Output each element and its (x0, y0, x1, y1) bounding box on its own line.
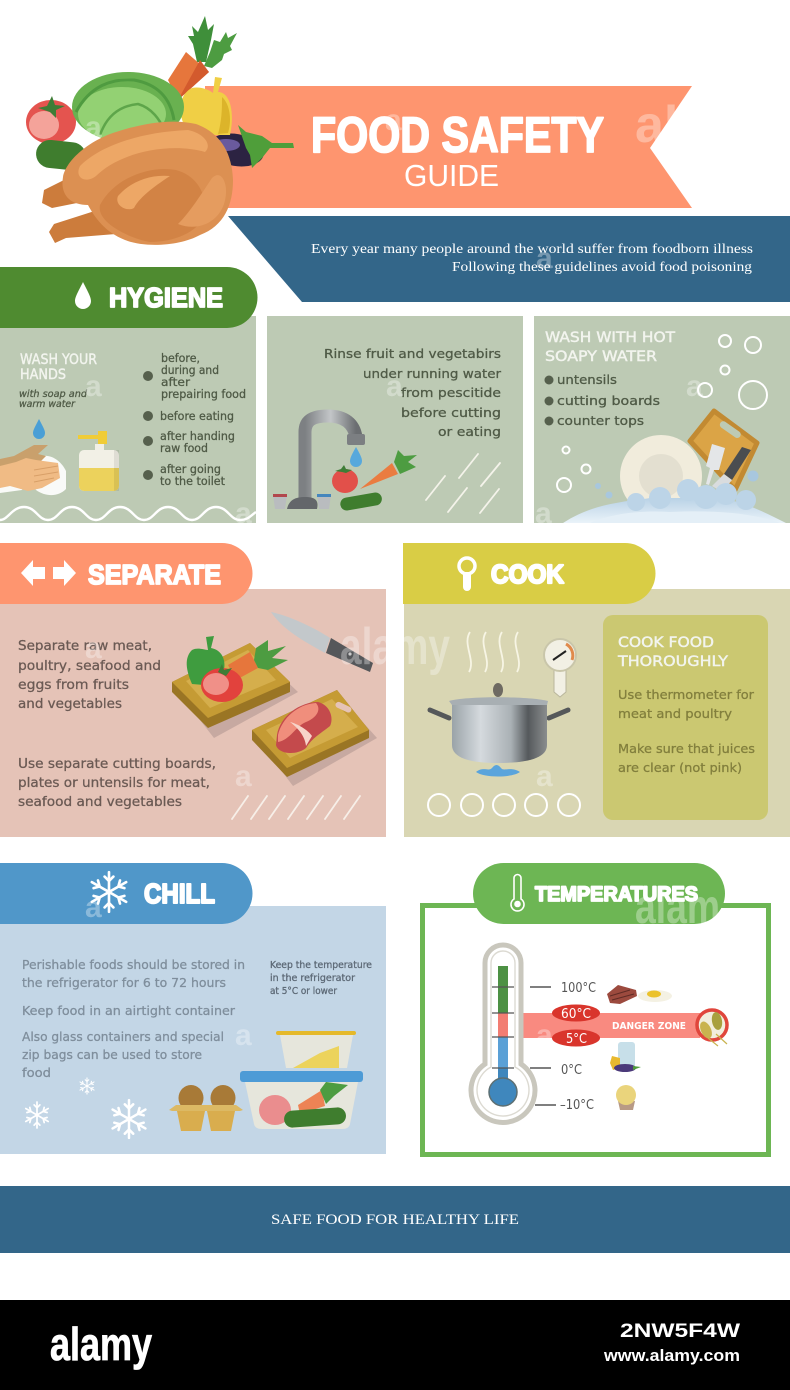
pepper (187, 636, 224, 685)
list: items to wash: cutting boards (557, 393, 660, 408)
icon: muffin (616, 1085, 636, 1110)
text: separate boards (18, 757, 216, 810)
scale labels: 0°C (561, 1062, 582, 1078)
subtitle: GUIDE (404, 158, 499, 193)
icon: vegetable container (240, 1071, 363, 1129)
icon: knife (271, 612, 373, 672)
icon: cheese container (276, 1031, 356, 1068)
intro text: Every year many people around the world suffer from foodborn illness (311, 242, 753, 257)
list: when to wash: prepairing food (161, 387, 246, 401)
text: separate boards: Use separate cutting boards, (18, 757, 216, 772)
heading tab: separate (0, 543, 252, 604)
text: rinse instructions: under running water (363, 366, 502, 381)
card: cook food thoroughly: Make sure that juices (618, 741, 755, 756)
icon: gas flame (476, 765, 520, 776)
icon: cucumber (339, 491, 383, 512)
section: chill (0, 863, 386, 1154)
subheading: with soap and (19, 389, 88, 400)
text: fridge temperature: in the refrigerator (270, 973, 355, 984)
text: storage guidance: the refrigerator for 6 to 72 hours (22, 975, 226, 990)
watermarks: al (635, 96, 678, 154)
card: cook food thoroughly: THOROUGHLY (617, 654, 728, 670)
icon: eggplant (206, 125, 294, 171)
logo text: alamy (50, 1318, 152, 1370)
panel: wash your hands: warm water (19, 399, 76, 410)
text: separate raw foods (18, 639, 161, 712)
section: cook (403, 543, 790, 837)
list: when to wash: before, (161, 351, 200, 365)
text: storage guidance: food (22, 1065, 51, 1080)
panel: separate (0, 589, 386, 837)
watermarks (85, 96, 720, 1052)
text: rinse instructions: from pescitide (401, 385, 501, 400)
list: when to wash: after (161, 375, 190, 389)
text: storage guidance (22, 957, 245, 1080)
watermarks: a (536, 1019, 553, 1052)
icon: faucet (273, 416, 365, 509)
watermarks: a (235, 760, 252, 793)
text: fridge temperature (270, 960, 372, 997)
text: rinse instructions: before cutting (401, 405, 501, 420)
scale ticks (530, 987, 556, 1105)
list: when to wash: to the toilet (160, 474, 225, 488)
label: 60 degrees: 60°C (561, 1007, 591, 1022)
watermarks: a (686, 370, 703, 403)
text: rinse instructions: Rinse fruit and vegetabirs (324, 346, 501, 361)
thermometer column (489, 966, 517, 1106)
icon: meat and egg (607, 985, 672, 1004)
icon: no bacteria (697, 1010, 727, 1046)
text: storage guidance: Keep food in an airtight container (22, 1003, 236, 1018)
decorative bubbles (557, 335, 767, 492)
title: FOOD SAFETY (311, 107, 604, 163)
text: rinse instructions (324, 346, 502, 439)
banner: intro (228, 216, 790, 302)
panel: cook (404, 589, 790, 837)
heading text: TEMPERATURES (535, 883, 698, 906)
heading text: HYGIENE (109, 282, 223, 313)
icon: meat board (252, 690, 377, 786)
heading tab: hygiene (0, 267, 258, 328)
list: when to wash: during and (161, 363, 219, 377)
section: temperatures (422, 863, 768, 1154)
icon: carrot (360, 450, 417, 489)
icon: vegetable board (172, 636, 298, 738)
heading tab: temperatures (473, 863, 725, 924)
heading text: SEPARATE (88, 559, 221, 590)
banner: intro: Following these guidelines avoid food poisoning (452, 260, 752, 275)
watermarks: a (85, 370, 102, 403)
panel: wash with hot soapy water: SOAPY WATER (545, 349, 657, 365)
icon: washing hands (0, 445, 66, 495)
icon: bell pepper (180, 77, 232, 135)
carrot (228, 652, 258, 680)
list: when to wash: before eating (160, 409, 234, 423)
icon: snowflake (92, 872, 126, 912)
icon: dial thermometer (544, 639, 576, 697)
steak (276, 702, 332, 753)
icon: thermometer (511, 874, 524, 911)
icon: cucumber (35, 139, 87, 172)
text: fridge temperature: Keep the temperature (270, 960, 372, 971)
scale labels: –10°C (560, 1097, 594, 1113)
icon: small soap bubbles (595, 470, 758, 498)
icon: cutting board (690, 411, 757, 490)
icon: thermometer key (459, 558, 475, 591)
icon: small snowflakes (26, 1078, 145, 1138)
card: cook food thoroughly (603, 615, 768, 820)
list: when to wash: after going (160, 462, 221, 476)
watermarks: a (235, 497, 252, 530)
text: separate raw foods: Separate raw meat, (18, 639, 152, 654)
decorative steam (467, 632, 519, 672)
heading text: COOK (491, 559, 564, 589)
image id: 2NW5F4W (620, 1321, 740, 1342)
panel: temperature frame (422, 906, 768, 1154)
panel: wash your hands: HANDS (20, 367, 66, 383)
heading: wash your hands: WASH YOUR (20, 352, 97, 368)
card text: Use thermometer for (618, 687, 755, 702)
decorative rain (426, 454, 500, 513)
text: storage guidance: Perishable foods should be stored in (22, 957, 245, 972)
panel: chill (0, 906, 386, 1154)
text: rinse instructions: or eating (438, 424, 501, 439)
watermarks: a (385, 104, 402, 137)
text: separate boards: plates or untensils for meat, (18, 776, 210, 791)
icon: cooking pot (430, 683, 568, 763)
list: when to wash (143, 351, 246, 488)
tomato (201, 668, 243, 702)
icon: egg carton (169, 1085, 243, 1131)
text: storage guidance: Also glass containers and special (22, 1029, 224, 1044)
icon: spatula and knife (706, 444, 751, 492)
section: hygiene (0, 267, 258, 523)
panel: rinse produce (267, 316, 523, 523)
watermarks: a (85, 891, 102, 924)
icon: cabbage (72, 72, 184, 142)
icon: roast chicken (42, 122, 233, 245)
icon: tomato (26, 96, 76, 144)
watermarks: a (85, 632, 102, 665)
card: cook food thoroughly: are clear (not pink) (618, 760, 742, 775)
website: www.alamy.com (603, 1346, 740, 1365)
icon: soap dispenser (78, 431, 119, 491)
watermarks: a (386, 370, 403, 403)
icon: drop (75, 282, 91, 309)
banner: title ribbon (205, 86, 692, 208)
heading text: CHILL (144, 878, 215, 909)
text: separate raw foods: and vegetables (18, 697, 122, 712)
heading tab: cook (403, 543, 655, 604)
watermarks: a (536, 760, 553, 793)
icon: carrot (168, 16, 237, 100)
text: separate raw foods: eggs from fruits (18, 678, 129, 693)
illustration: food pile (26, 16, 294, 245)
icon: arrows (21, 560, 76, 586)
watermarks: alamy (340, 618, 450, 676)
text: separate raw foods: poultry, seafood and (18, 659, 161, 674)
icon: water drop (350, 447, 362, 467)
watermarks: a (536, 242, 553, 275)
thermometer body (471, 945, 535, 1122)
heading: WASH WITH HOT (545, 330, 675, 346)
section: separate (0, 543, 386, 837)
icon: fridge foods (610, 1042, 641, 1072)
list: when to wash: raw food (160, 441, 208, 455)
list: items to wash (544, 372, 660, 428)
list: items to wash: counter tops (557, 413, 644, 428)
scale labels: 100°C (561, 980, 596, 996)
danger zone band (517, 1013, 700, 1038)
footer text: SAFE FOOD FOR HEALTHY LIFE (271, 1212, 519, 1228)
text: fridge temperature: at 5°C or lower (270, 986, 337, 997)
card: cook food thoroughly: meat and poultry (618, 706, 733, 721)
text: storage guidance: zip bags can be used to store (22, 1047, 202, 1062)
decorative wave (0, 507, 256, 520)
text: separate boards: seafood and vegetables (18, 795, 182, 810)
scale labels (560, 980, 596, 1113)
footer banner (0, 1186, 790, 1253)
icon: soap foam (563, 479, 786, 523)
stock photo bar (0, 1300, 790, 1390)
list: items to wash: untensils (557, 372, 617, 387)
label: 5 degrees: 5°C (566, 1032, 587, 1047)
panel: wash your hands (0, 316, 256, 523)
icon: tomato (332, 465, 358, 493)
icon: plate (620, 435, 702, 517)
watermarks: a (235, 1019, 252, 1052)
icon: water drop (33, 419, 45, 439)
decorative circles (428, 794, 580, 816)
label: danger zone: DANGER ZONE (612, 1021, 686, 1032)
label: 5 degrees (552, 1030, 600, 1047)
decorative slashes (232, 796, 360, 819)
watermarks: a (85, 111, 102, 144)
heading tab: chill (0, 863, 252, 924)
chart: temperature thermometer (471, 945, 727, 1122)
panel: wash with hot soapy water (534, 316, 790, 523)
watermarks: a (535, 497, 552, 530)
list: when to wash: after handing (160, 429, 235, 443)
label: 60 degrees (552, 1004, 600, 1022)
watermarks: alam (635, 881, 720, 934)
card heading: COOK FOOD (618, 635, 714, 651)
